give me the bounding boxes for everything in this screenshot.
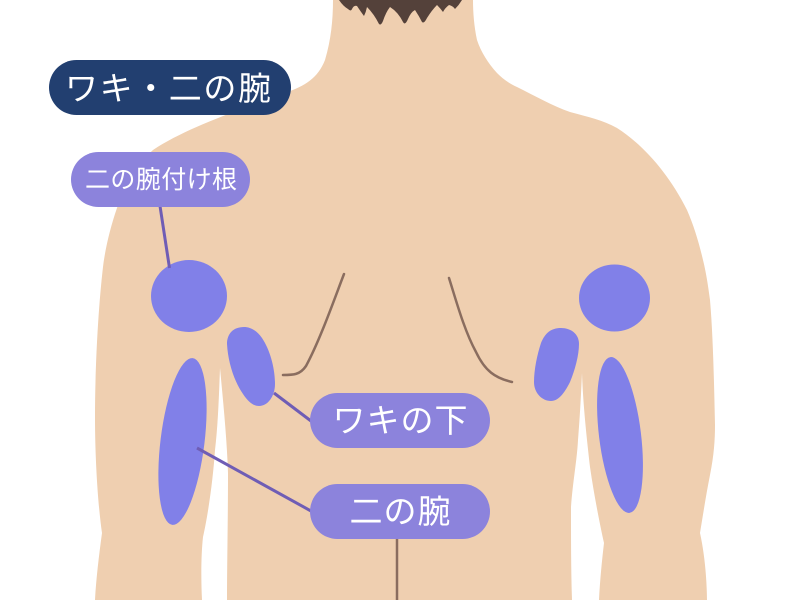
label: upper arm base (71, 152, 250, 207)
title pill (49, 60, 291, 115)
right chest crease (449, 278, 512, 382)
label: armpit (310, 393, 490, 448)
zone: right armpit (534, 328, 579, 401)
left chest crease (283, 274, 344, 375)
zone: left upper arm (150, 355, 215, 528)
body silhouette (95, 0, 715, 600)
leader line: upper arm (197, 448, 311, 511)
zone: left armpit (227, 327, 275, 406)
label: upper arm (310, 484, 490, 539)
zone: left upper arm base (151, 260, 227, 332)
leader line: upper arm base (160, 206, 170, 268)
label: upper arm base: 二の腕付け根 (85, 166, 237, 194)
hair (339, 0, 462, 25)
leader line: armpit (274, 393, 311, 421)
zone: right upper arm (590, 355, 650, 515)
label: armpit: ワキの下 (332, 402, 468, 439)
center back line (396, 539, 398, 600)
label: upper arm: 二の腕 (350, 493, 450, 530)
title pill: ワキ・二の腕 (65, 70, 271, 107)
zone: right upper arm base (579, 264, 650, 332)
